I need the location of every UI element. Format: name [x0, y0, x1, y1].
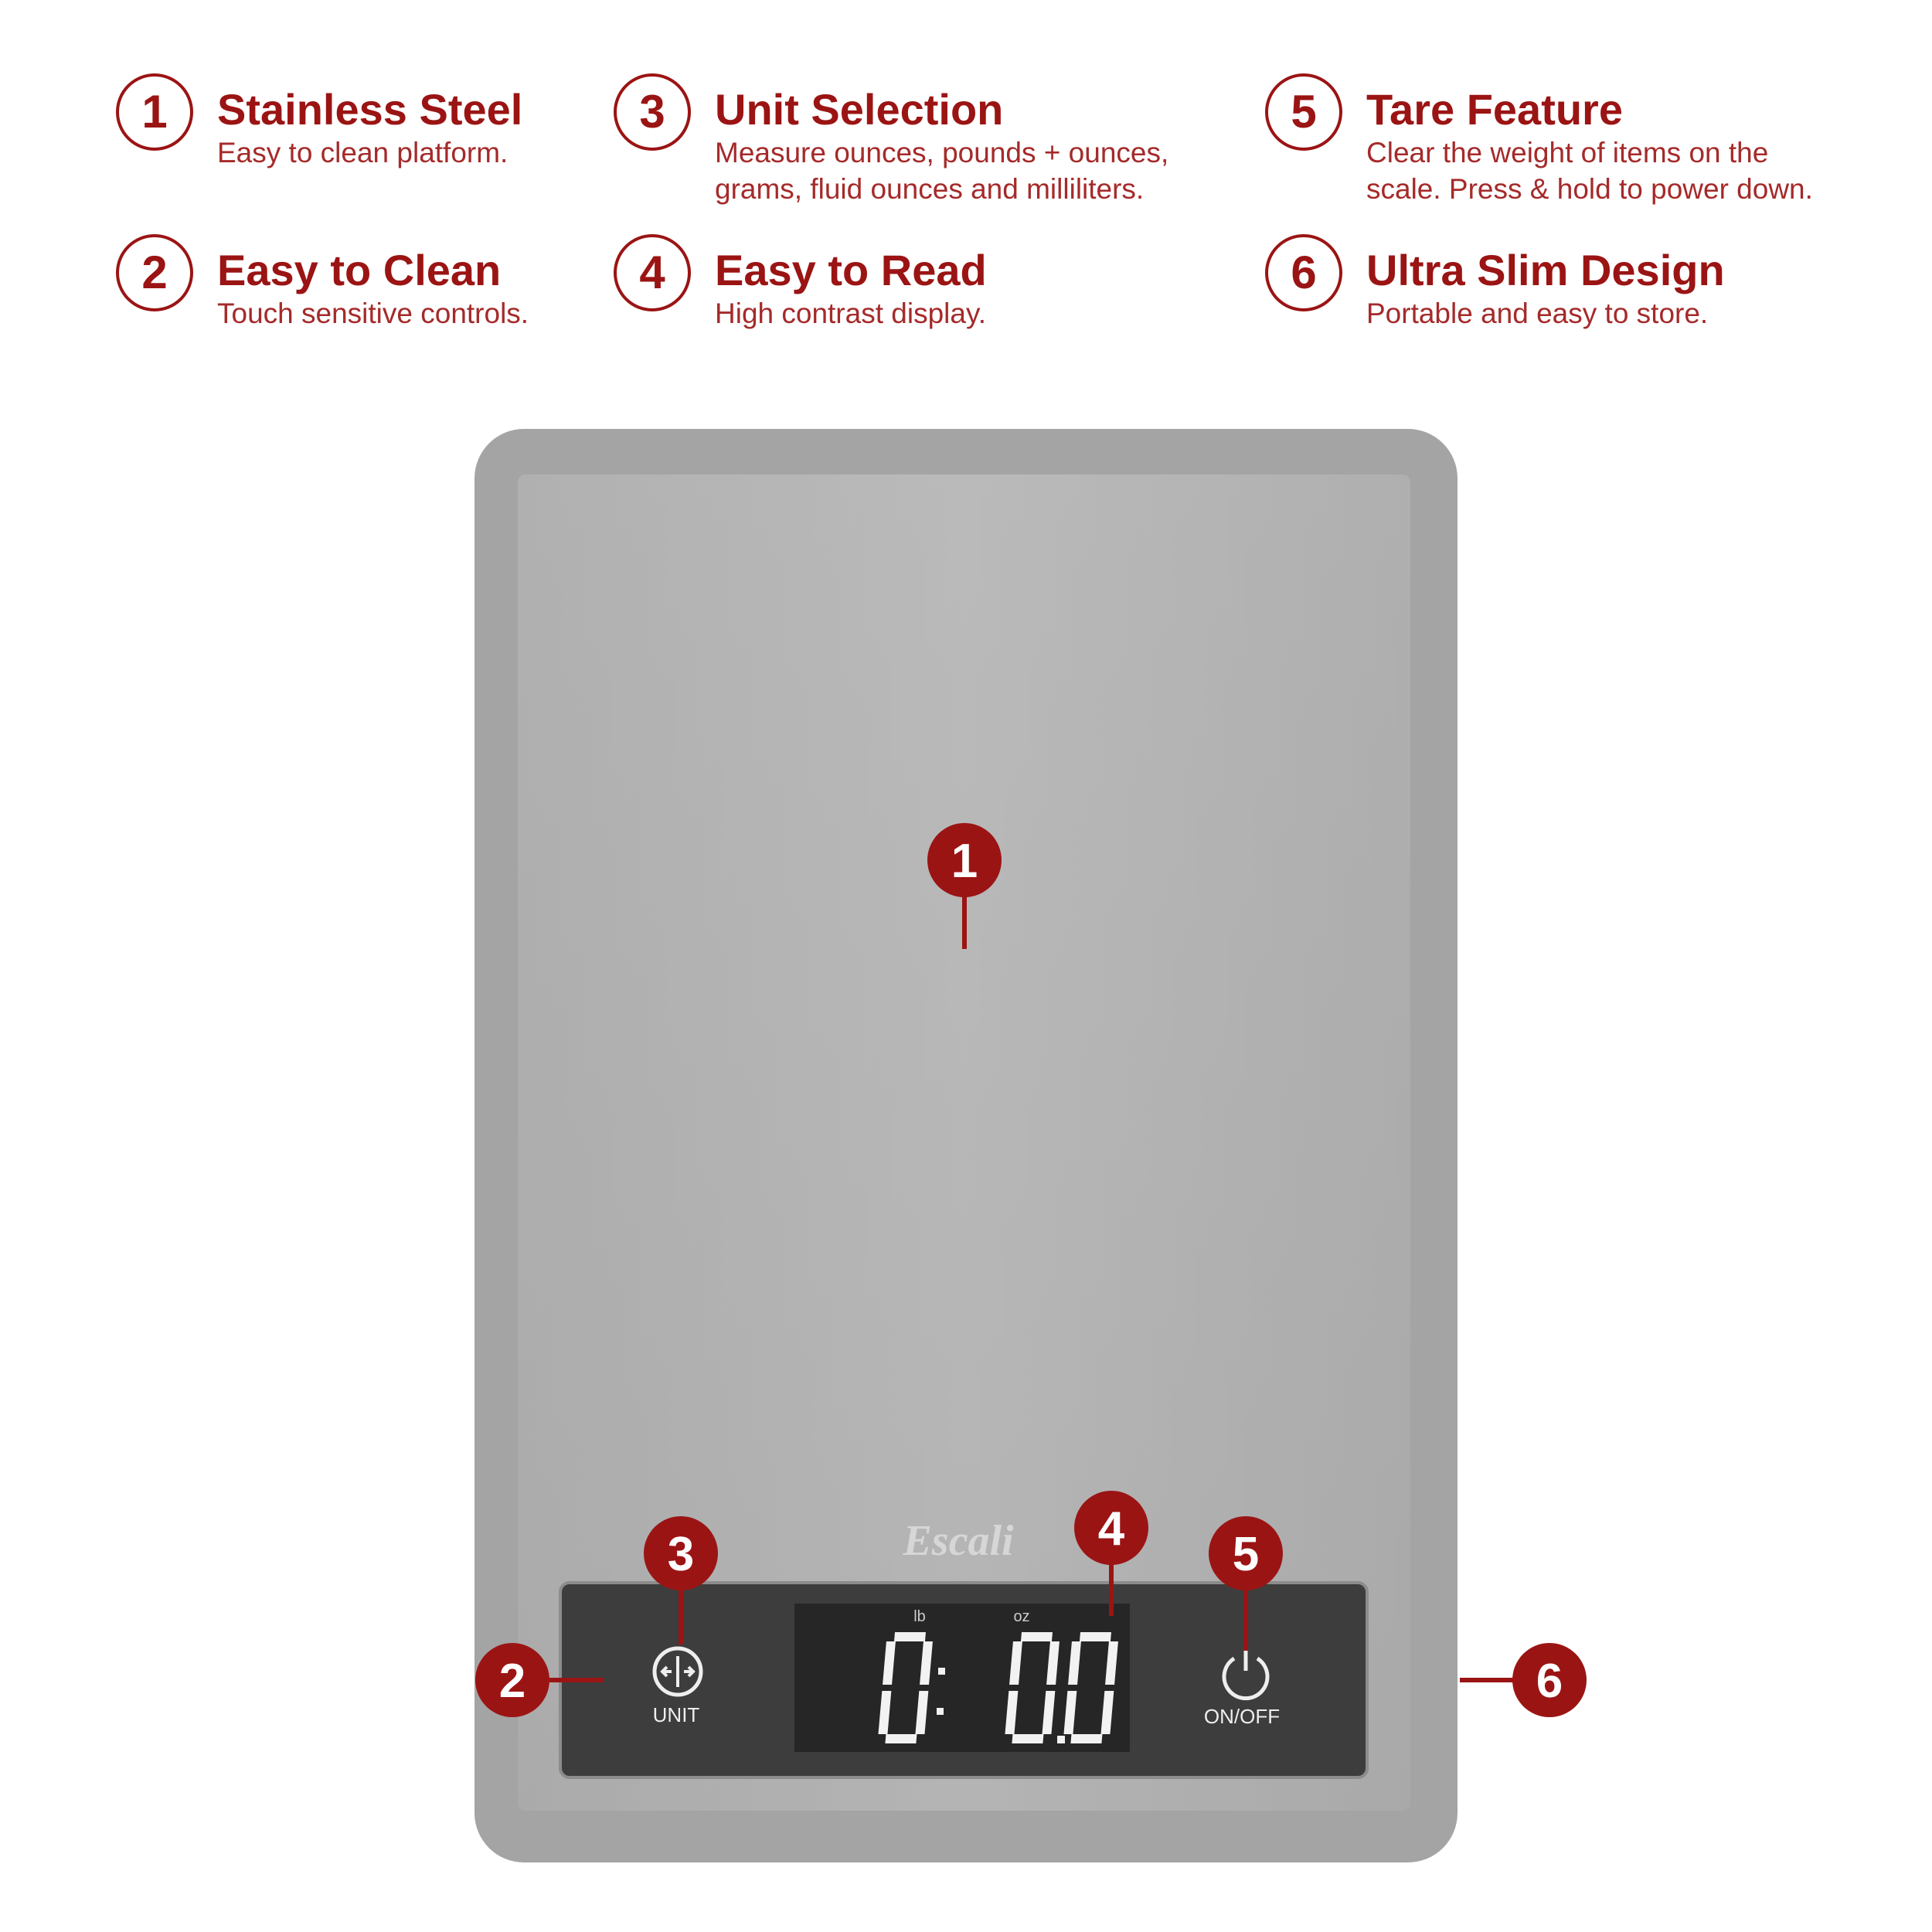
- control panel: [560, 1583, 1367, 1777]
- feature 5: 5: [1291, 86, 1317, 138]
- marker 3: [644, 1516, 718, 1645]
- marker 2: 2: [499, 1655, 526, 1708]
- feature 3: grams, fluid ounces and milliliters.: [715, 173, 1144, 205]
- LCD display: lb: [913, 1608, 926, 1625]
- LCD display: oz: [1013, 1608, 1030, 1625]
- feature 2: Easy to Clean: [217, 246, 501, 294]
- marker 5: [1209, 1516, 1283, 1651]
- feature 5: [1265, 73, 1813, 205]
- feature 2: [116, 234, 529, 329]
- feature 5: scale. Press & hold to power down.: [1366, 173, 1813, 205]
- marker 5: 5: [1233, 1528, 1259, 1581]
- feature 4: [614, 234, 987, 329]
- feature 2: 2: [141, 247, 168, 298]
- feature 4: 4: [639, 247, 665, 298]
- feature 1: Easy to clean platform.: [217, 137, 508, 168]
- marker 1: 1: [951, 835, 978, 888]
- feature 4: Easy to Read: [715, 246, 987, 294]
- feature 6: Ultra Slim Design: [1366, 246, 1725, 294]
- feature 3: Measure ounces, pounds + ounces,: [715, 137, 1168, 168]
- marker 4: [1074, 1491, 1148, 1616]
- feature 3: Unit Selection: [715, 85, 1003, 134]
- marker 6: [1460, 1643, 1587, 1717]
- unit button: [653, 1648, 701, 1726]
- marker 4: 4: [1098, 1502, 1125, 1556]
- scale body: [474, 429, 1458, 1862]
- feature 1: [116, 73, 522, 168]
- feature 2: Touch sensitive controls.: [217, 298, 529, 329]
- feature 3: 3: [639, 86, 665, 138]
- feature 5: Tare Feature: [1366, 85, 1623, 134]
- marker 1: [927, 823, 1002, 949]
- marker 6: 6: [1536, 1655, 1563, 1708]
- feature 3: [614, 73, 1168, 205]
- feature 6: 6: [1291, 247, 1317, 298]
- marker 2: [475, 1643, 604, 1717]
- feature 6: Portable and easy to store.: [1366, 298, 1708, 329]
- on/off button: [1204, 1648, 1280, 1728]
- marker 3: 3: [668, 1528, 694, 1581]
- feature 4: High contrast display.: [715, 298, 986, 329]
- feature 1: Stainless Steel: [217, 85, 522, 134]
- LCD display: [794, 1604, 1130, 1752]
- brand logo: Escali: [902, 1517, 1014, 1565]
- unit button: UNIT: [653, 1703, 699, 1726]
- feature 1: 1: [141, 86, 168, 138]
- on/off button: ON/OFF: [1204, 1705, 1280, 1728]
- feature 6: [1265, 234, 1725, 329]
- feature 5: Clear the weight of items on the: [1366, 137, 1768, 168]
